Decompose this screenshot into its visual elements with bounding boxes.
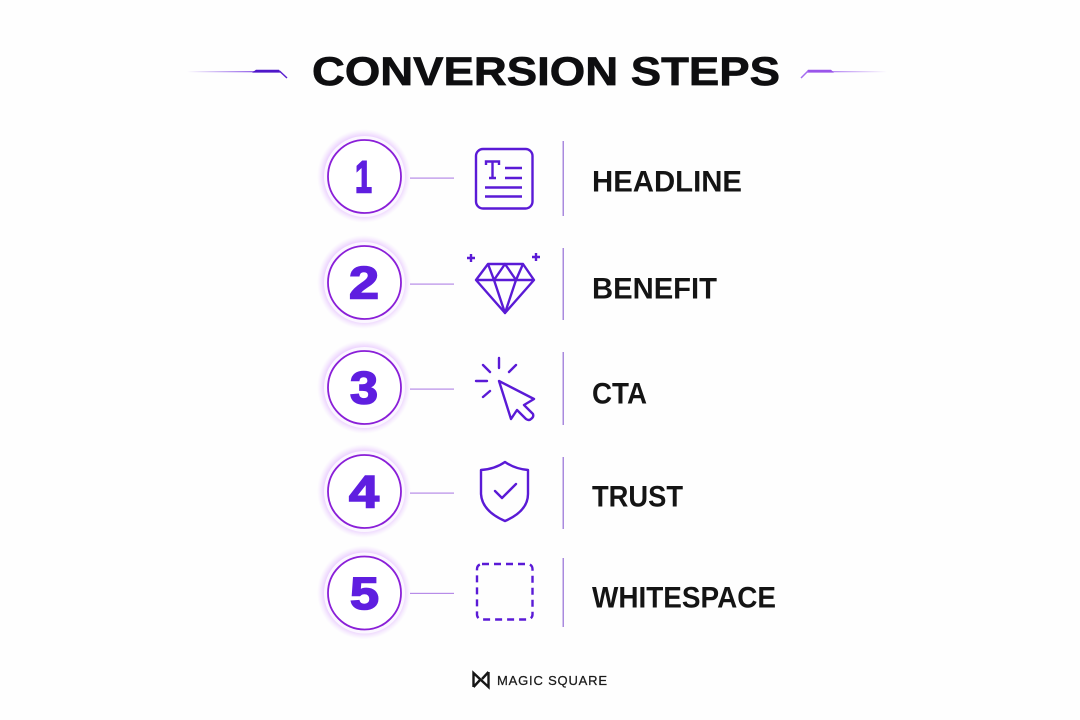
brand logo: [474, 672, 607, 688]
right title ornament: [801, 70, 887, 78]
connector 3: [410, 388, 454, 390]
connector 1: [410, 178, 454, 179]
divider 5: [562, 558, 564, 627]
number badge 4: [317, 444, 411, 538]
step 5: whitespace: [317, 546, 776, 640]
connector 2: [410, 284, 454, 285]
number badge 3: [317, 340, 411, 434]
number badge 5: 5: [350, 568, 379, 619]
step 1: headline: [317, 129, 742, 223]
divider 4: [562, 457, 564, 529]
icon: diamond: [467, 253, 540, 313]
icon: shield check: [481, 462, 528, 521]
divider 3: [562, 352, 564, 425]
step 2: benefit: [317, 235, 717, 329]
left title ornament: [187, 70, 287, 78]
brand name: MAGIC SQUARE: [497, 673, 607, 688]
label: whitespace: WHITESPACE: [592, 582, 776, 614]
label: trust: TRUST: [592, 480, 683, 514]
number badge 3: 3: [350, 362, 378, 414]
connector 4: [410, 492, 454, 494]
number badge 2: 2: [349, 258, 379, 308]
label: headline: HEADLINE: [592, 166, 742, 198]
number badge 5: [317, 546, 411, 640]
icon: headline document: [476, 149, 532, 208]
title text: CONVERSION STEPS: [312, 50, 780, 94]
label: cta: CTA: [592, 378, 647, 410]
number badge 1: [317, 129, 411, 223]
divider 2: [562, 248, 564, 320]
label: benefit: BENEFIT: [592, 272, 717, 306]
number badge 2: [317, 235, 411, 329]
icon: logo mark: [474, 672, 488, 687]
step 4: trust: [317, 444, 683, 538]
step 3: cta: [317, 340, 647, 434]
number badge 4: 4: [349, 466, 379, 518]
connector 5: [410, 593, 454, 594]
icon: cursor click: [476, 358, 534, 420]
title: [187, 50, 887, 94]
icon: dashed square: [477, 564, 532, 620]
number badge 1: 1: [355, 152, 372, 202]
divider 1: [562, 141, 564, 216]
